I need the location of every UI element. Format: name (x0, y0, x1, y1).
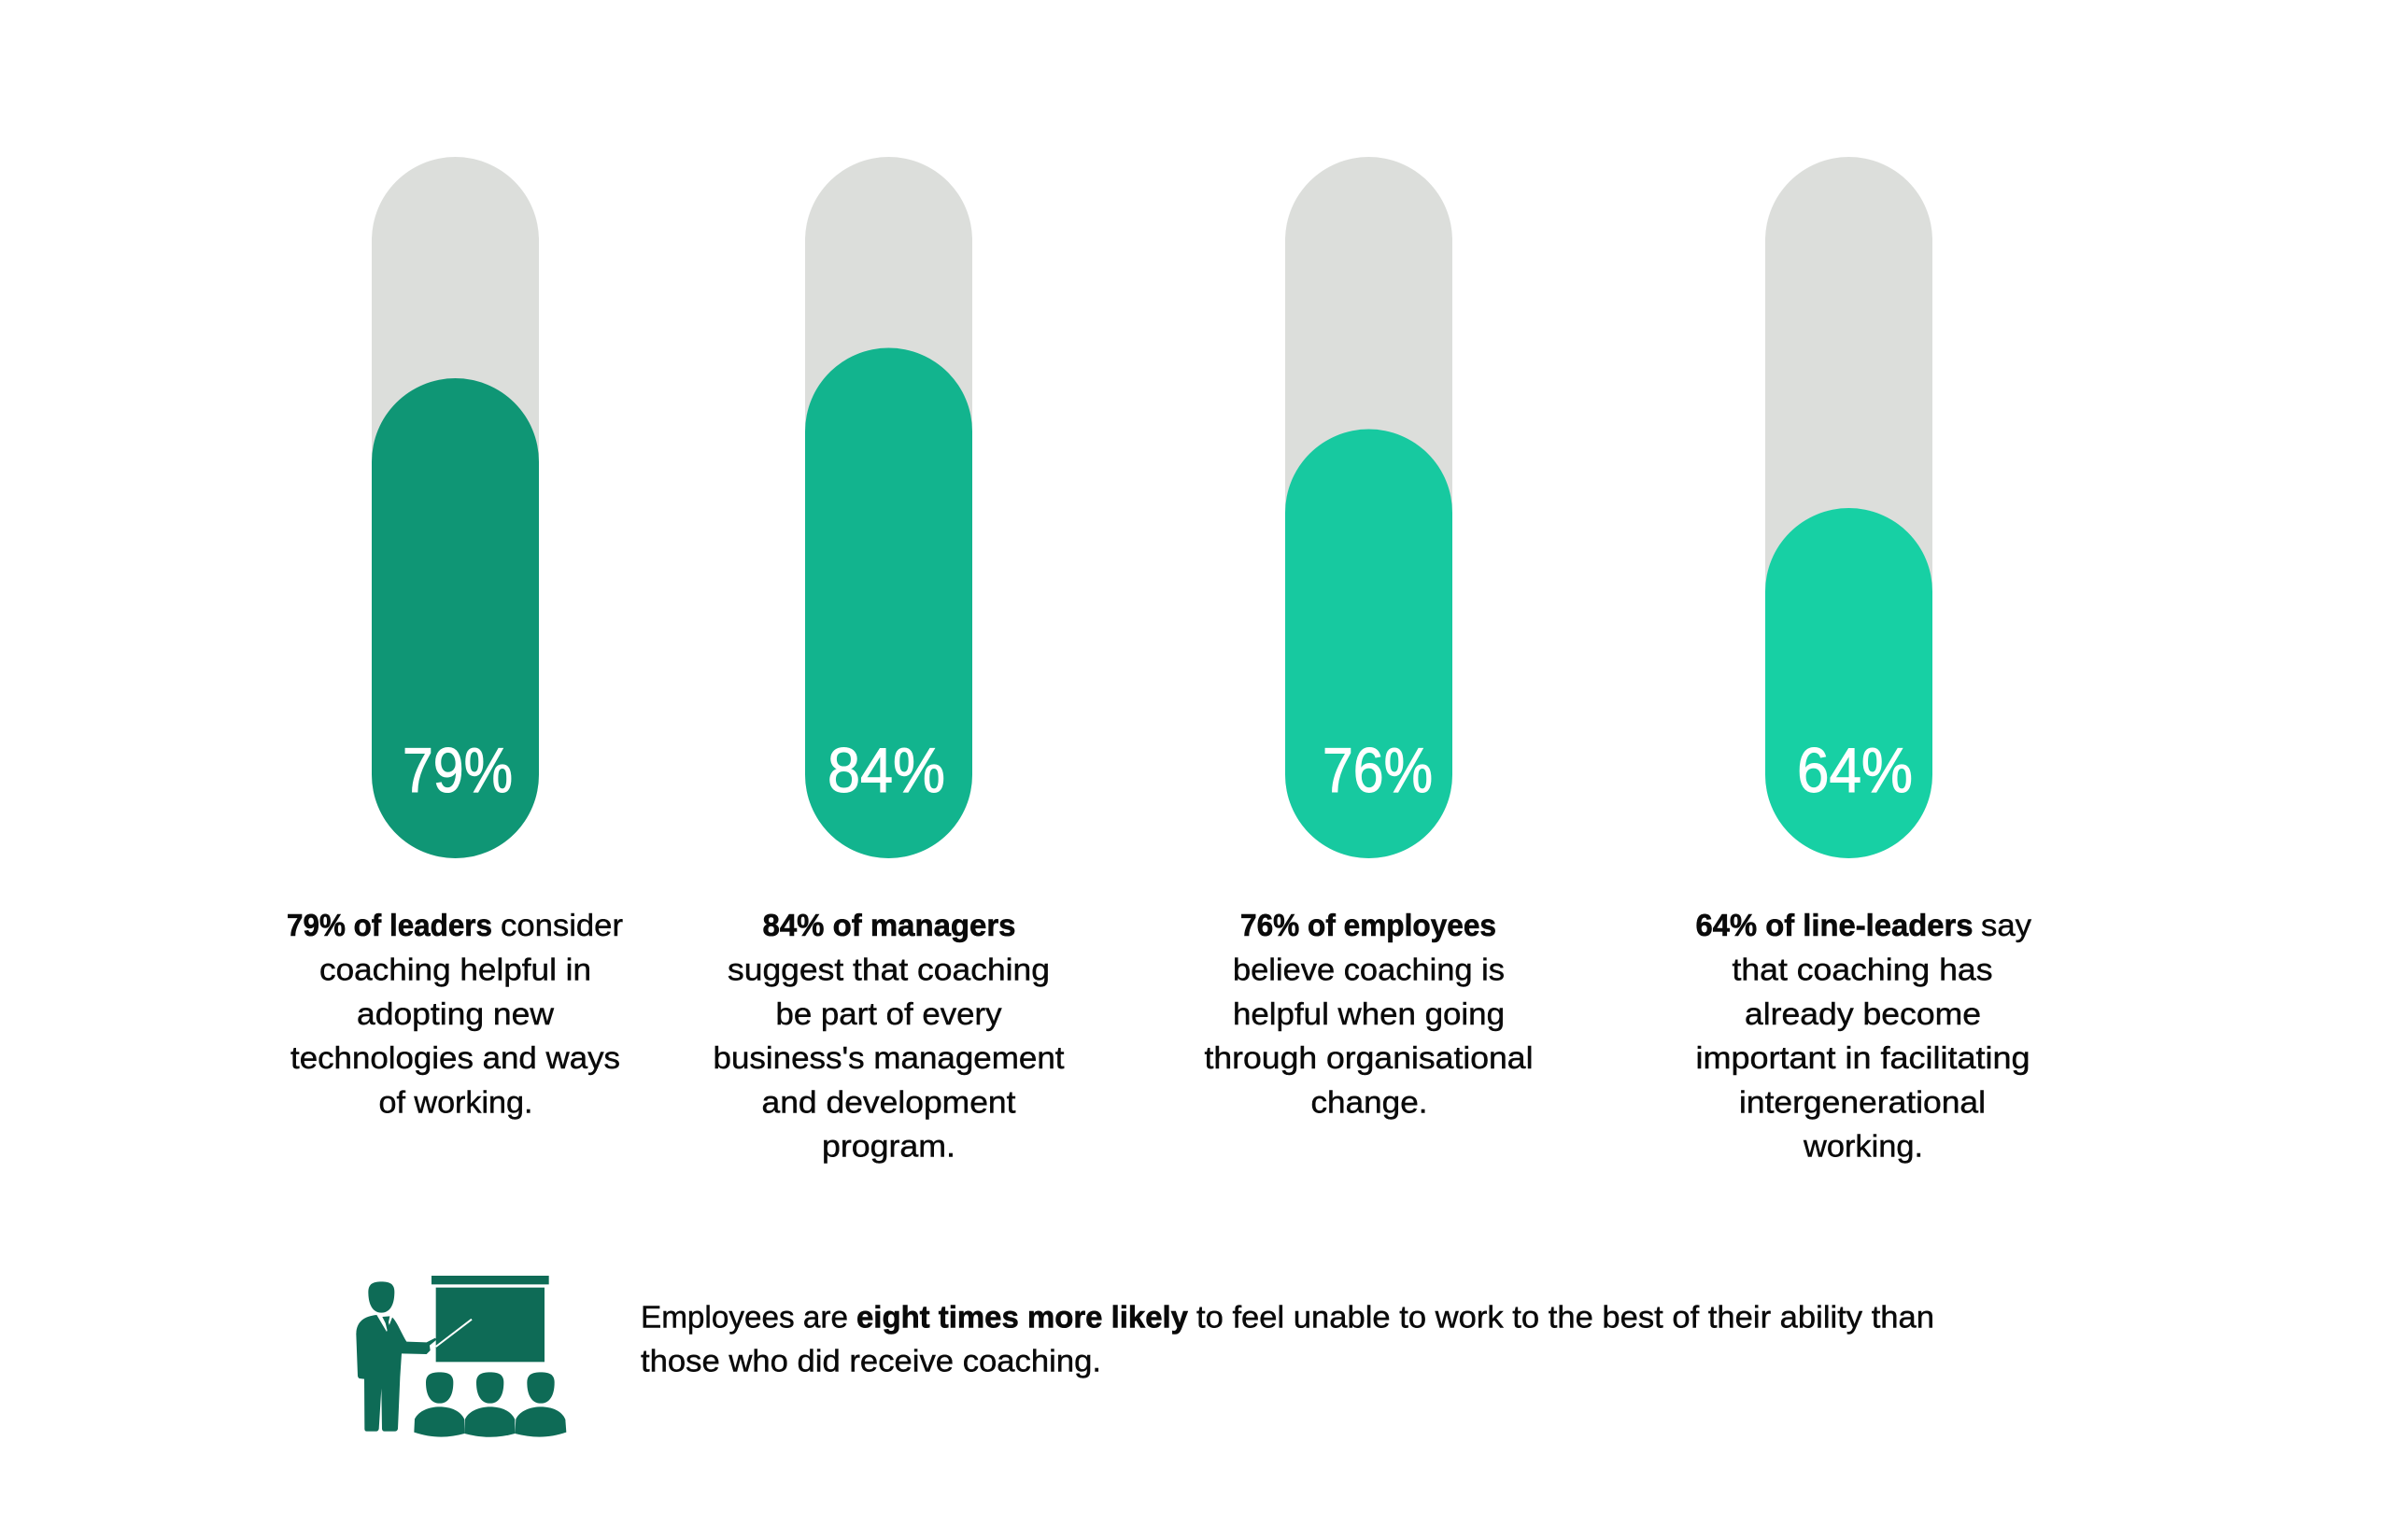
callout: eight times more likely: eight times more likely (856, 1300, 1188, 1335)
presentation board (436, 1288, 545, 1362)
panel: managers statistic (714, 157, 1065, 1164)
bar fill: leaders 79% (372, 378, 539, 858)
text block: managers description: suggest that coaching (728, 953, 1050, 988)
text block: leaders description: coaching helpful in (319, 953, 591, 988)
text block: employees description (1205, 909, 1534, 1121)
text block: line-leaders description: working. (1803, 1130, 1923, 1164)
text block: managers description: and development (762, 1085, 1016, 1121)
bar track: managers (805, 157, 972, 858)
panel: line-leaders statistic (1696, 157, 2031, 1164)
text block: managers description: business's management (714, 1041, 1065, 1076)
text block: line-leaders description: intergenerational (1739, 1085, 1986, 1121)
text block: managers description: 84% of managers (762, 909, 1016, 943)
text block: employees description: change. (1311, 1085, 1427, 1121)
text block: leaders description: 79% of leaders (287, 909, 492, 943)
text block: employees description: through organisational (1205, 1041, 1534, 1076)
bar fill: employees 76% (1285, 430, 1452, 858)
bar track: line-leaders (1765, 157, 1932, 858)
text block: line-leaders description (1696, 909, 2031, 1164)
panel: leaders statistic (287, 157, 623, 1121)
text block: line-leaders description: already become (1745, 997, 1981, 1032)
bar fill: managers 84% (805, 347, 972, 858)
text block: leaders description: of working. (379, 1085, 532, 1121)
bar track: employees (1285, 157, 1452, 858)
icon: presenter pointing at board with audience (356, 1276, 566, 1437)
audience member 2 (464, 1372, 515, 1437)
value: 84%: 84% (828, 735, 945, 806)
board top rail (432, 1276, 549, 1284)
bar fill: line-leaders 64% (1765, 508, 1932, 858)
audience member 1 (414, 1372, 464, 1437)
callout: eight times more likely: Employees are (641, 1300, 848, 1335)
text block: employees description: helpful when going (1233, 997, 1505, 1032)
bar track: leaders (372, 157, 539, 858)
callout: eight times more likely (641, 1300, 1934, 1378)
panel: employees statistic (1205, 157, 1534, 1121)
text block: line-leaders description: that coaching has (1732, 953, 1993, 988)
text block: line-leaders description: say (1981, 909, 2031, 943)
presenter (356, 1281, 436, 1432)
value: 64%: 64% (1797, 735, 1913, 806)
audience member 3 (515, 1372, 566, 1437)
text block: managers description (714, 909, 1065, 1164)
text block: managers description: be part of every (775, 997, 1002, 1032)
value: 79%: 79% (403, 735, 513, 806)
text block: line-leaders description: important in facilitating (1696, 1041, 2030, 1076)
text block: employees description: believe coaching is (1233, 953, 1505, 988)
text block: leaders description: adopting new (357, 997, 555, 1032)
callout: eight times more likely: those who did receive coaching. (641, 1345, 1101, 1378)
callout: eight times more likely: to feel unable to work to the best of their ability than (1196, 1300, 1934, 1335)
pointer (436, 1320, 472, 1347)
text block: line-leaders description: 64% of line-leaders (1696, 909, 1973, 943)
text block: leaders description (287, 909, 623, 1121)
text block: leaders description: technologies and ways (290, 1041, 620, 1076)
text block: employees description: 76% of employees (1240, 909, 1496, 943)
text block: managers description: program. (822, 1130, 955, 1164)
value: 76%: 76% (1323, 735, 1433, 806)
text block: leaders description: consider (501, 909, 623, 943)
